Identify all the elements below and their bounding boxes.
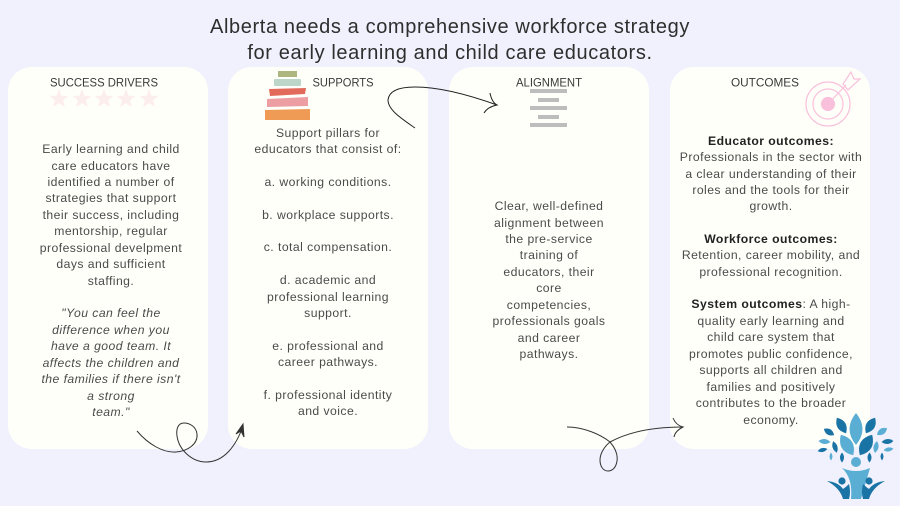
heading: success drivers: SUCCESS DRIVERS [50,76,158,90]
text: system outcomes [689,297,853,427]
text: system outcomes: System outcomes: A high- [691,297,851,311]
text: success drivers description: mentorship, regular [54,224,168,238]
text: supports list: professional learning [267,290,389,304]
arrow: supports to alignment [388,87,497,128]
logo: tree with people [817,413,894,499]
text: workforce outcomes [682,232,860,279]
text: educator quote: "You can feel the [61,306,161,320]
text: supports list: f. professional identity [264,388,393,402]
text: supports list: career pathways. [278,355,378,369]
text: supports list: educators that consist of: [254,142,402,156]
text: educator quote: affects the children and [43,356,180,370]
text: system outcomes: contributes to the broader [696,396,846,410]
text: educator outcomes: Educator outcomes: [708,134,834,148]
text: system outcomes: supports all children and [699,363,843,377]
text: system outcomes: economy. [743,413,799,427]
text: system outcomes: quality early learning and [697,314,845,328]
tree figure [851,457,861,467]
text: supports list [254,126,402,418]
text: educator quote: team." [92,405,130,419]
heading: supports: SUPPORTS [312,76,374,90]
text: system outcomes: families and positively [707,380,836,394]
text: workforce outcomes: professional recognition. [699,265,843,279]
text: system outcomes: promotes public confidence, [689,347,853,361]
text: success drivers description: their success, including [43,208,179,222]
text: educator outcomes: Professionals in the sector with [680,150,862,164]
text: supports list: e. professional and [272,339,384,353]
text: supports list: d. academic and [280,273,376,287]
text: educator outcomes: a clear understanding of their [685,167,857,181]
text: supports list: Support pillars for [276,126,380,140]
text: alignment description: professionals goals [493,314,605,328]
text: educator quote [41,306,181,419]
text: success drivers description: identified a number of [47,175,175,189]
text: success drivers description: care educators have [52,159,170,173]
icon: five stars [50,89,158,107]
arrow: alignment to outcomes [567,418,683,471]
title [210,16,690,64]
heading: outcomes: OUTCOMES [731,76,799,90]
text: supports list: a. working conditions. [264,175,392,189]
text: educator quote: have a good team. It [51,339,171,353]
title: for early learning and child care educators. [247,42,653,64]
text: educator outcomes: growth. [749,199,793,213]
text: alignment description: core [536,281,562,295]
text: system outcomes: child care system that [707,330,835,344]
arrow: success drivers to supports [137,423,244,462]
text: success drivers description [40,142,182,288]
left person [827,477,850,499]
text: success drivers description: strategies that support [46,191,177,205]
text: alignment description: educators, their [503,265,595,279]
tree leaves [818,413,894,460]
text: workforce outcomes: Workforce outcomes: [704,232,838,246]
text: success drivers description: professional develpment [40,241,182,255]
text: alignment description: alignment between [494,216,604,230]
text: success drivers description: Early learning and child [42,142,180,156]
icon: target with arrow [806,72,860,126]
text: workforce outcomes: Retention, career mobility, and [682,248,860,262]
text: alignment description: training of [520,248,578,262]
text: supports list: c. total compensation. [264,240,392,254]
text: alignment description [493,199,605,361]
text: success drivers description: days and sufficient [56,257,166,271]
right person [862,477,885,499]
panel: outcomes [670,67,870,449]
panel: supports [228,67,428,449]
heading: alignment: ALIGNMENT [516,76,583,90]
panel: success drivers [8,67,208,449]
text: alignment description: the pre-service [505,232,593,246]
text: alignment description: Clear, well-defined [495,199,603,213]
text: supports list: and voice. [298,404,358,418]
text: educator outcomes [680,134,862,213]
text: alignment description: and career [518,331,580,345]
text: educator quote: difference when you [52,323,170,337]
text: educator quote: the families if there isn't [41,372,181,386]
text: educator outcomes: roles and the tools for their [692,183,850,197]
text: alignment description: competencies, [507,298,591,312]
text: supports list: support. [304,306,352,320]
text: alignment description: pathways. [520,347,578,361]
panel: alignment [449,67,649,449]
title: Alberta needs a comprehensive workforce strategy [210,16,690,38]
text: educator quote: a strong [87,389,135,403]
text: success drivers description: staffing. [88,274,134,288]
icon: stacked rings [265,71,310,120]
text: supports list: b. workplace supports. [262,208,394,222]
icon: centered lines [530,89,567,127]
